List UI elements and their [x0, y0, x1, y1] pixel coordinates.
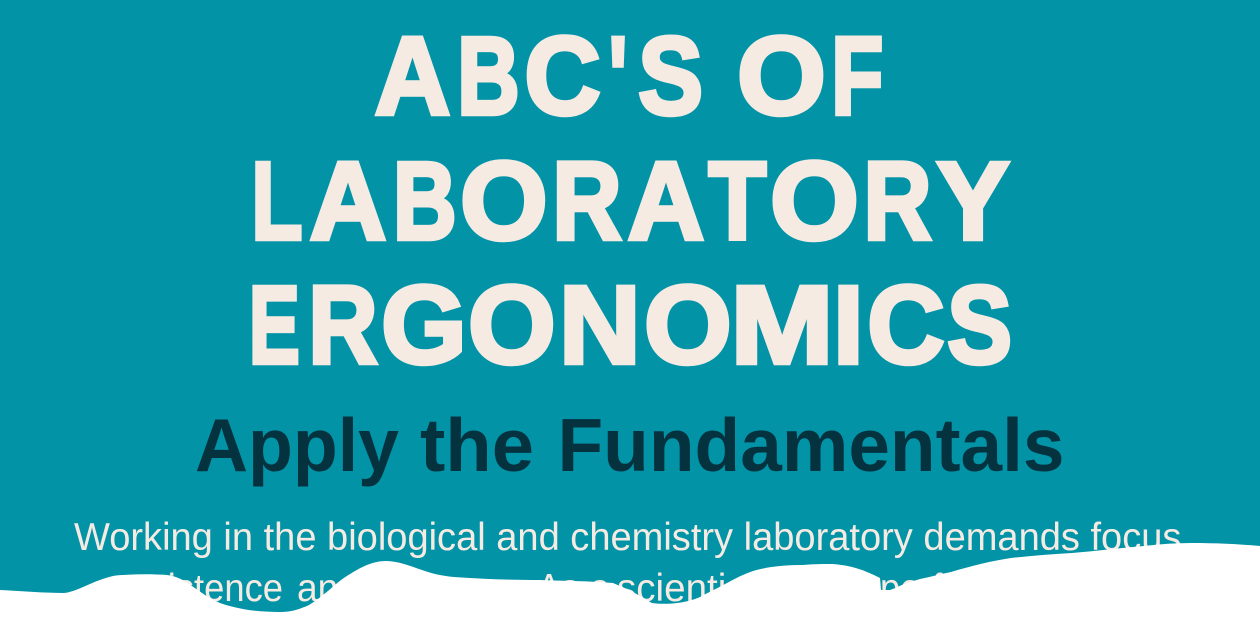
title: N	[559, 264, 641, 387]
title: A	[375, 15, 450, 138]
subtitle: Fundamentals	[558, 403, 1064, 487]
intro paragraph: perform	[880, 567, 1005, 610]
title: O	[468, 264, 556, 387]
title: F	[831, 15, 883, 138]
intro paragraph: Working in the biological and chemistry laboratory demands focus,	[74, 516, 1192, 559]
title: O	[460, 140, 548, 263]
title: A	[310, 140, 386, 263]
subtitle: the	[420, 403, 534, 487]
title: S	[638, 15, 703, 138]
title: M	[731, 264, 833, 387]
title: G	[381, 264, 466, 387]
title: B	[457, 15, 520, 138]
title: R	[864, 140, 932, 263]
intro paragraph: scientist,	[617, 567, 767, 610]
intro paragraph: and	[297, 567, 359, 610]
title: L	[251, 140, 302, 263]
title	[249, 15, 1012, 387]
intro paragraph: you	[778, 567, 838, 610]
intro paragraph: a	[590, 567, 610, 610]
intro paragraph	[74, 516, 1192, 610]
intro paragraph: patience.	[368, 567, 525, 610]
title: B	[393, 140, 457, 263]
title: C	[867, 264, 945, 387]
intro paragraph: As	[537, 567, 579, 610]
title: I	[833, 264, 863, 387]
title: E	[249, 264, 300, 387]
title: T	[708, 140, 766, 263]
title: R	[552, 140, 622, 263]
title: Y	[937, 140, 1009, 263]
intro paragraph: persistence	[97, 567, 283, 610]
torn white paper edge	[0, 543, 1260, 630]
title: A	[628, 140, 704, 263]
title: '	[609, 15, 627, 138]
title: O	[737, 15, 826, 138]
subtitle: Apply	[195, 403, 399, 487]
title: S	[947, 264, 1012, 387]
title: C	[524, 15, 601, 138]
title: O	[644, 264, 732, 387]
title: O	[770, 140, 859, 263]
title: R	[308, 264, 378, 387]
